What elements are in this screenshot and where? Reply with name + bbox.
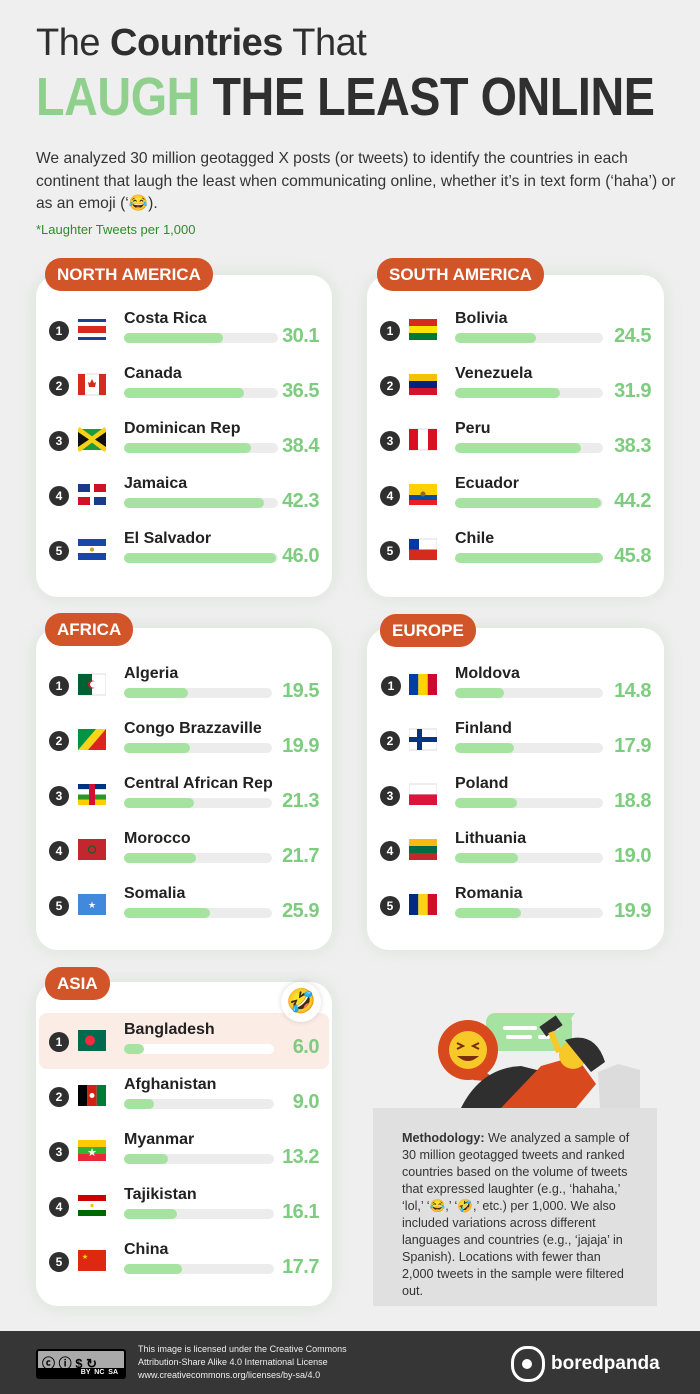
row: China: China xyxy=(124,1241,168,1258)
row: Peru: 3 xyxy=(387,434,393,448)
row: Chile xyxy=(380,530,651,567)
row: Congo xyxy=(49,720,319,757)
row: Moldova xyxy=(381,665,651,702)
row: Ecuador: 4 xyxy=(387,489,393,503)
row: Dominican Rep: 38.4 xyxy=(282,435,319,457)
label: south america: SOUTH AMERICA xyxy=(389,265,532,284)
row: Tajikistan xyxy=(49,1186,319,1223)
row: Jamaica: 4 xyxy=(56,489,62,503)
row: Myanmar: ★ xyxy=(87,1147,97,1159)
logo: boredpanda xyxy=(511,1346,660,1382)
row: Myanmar: Myanmar xyxy=(124,1131,194,1148)
icon: cc license badge: ⓒ ⓘ $ ↻ xyxy=(42,1356,97,1371)
label: europe: EUROPE xyxy=(392,621,464,640)
row: Costa Rica: 1 xyxy=(56,324,62,338)
row: Bangladesh xyxy=(49,1021,319,1058)
row: El Salvador: 46.0 xyxy=(282,545,319,567)
footer xyxy=(0,1331,700,1394)
speech bubble green xyxy=(486,1013,575,1051)
label: africa xyxy=(45,613,133,646)
row: Congo: Congo Brazzaville xyxy=(124,720,262,737)
row: Moldova: 14.8 xyxy=(614,680,651,702)
row: Myanmar: 13.2 xyxy=(282,1146,319,1168)
row: El Salvador xyxy=(49,530,319,567)
row: Somalia xyxy=(49,885,319,922)
highlight row background xyxy=(39,1013,329,1069)
row: Afghanistan: 2 xyxy=(56,1090,62,1104)
row: Afghanistan xyxy=(49,1076,319,1113)
row: Jamaica: Jamaica xyxy=(124,475,187,492)
row: Finland: Finland xyxy=(455,720,512,737)
row: China: ★ xyxy=(82,1253,88,1261)
row: Algeria: Algeria xyxy=(124,665,178,682)
row: Peru xyxy=(380,420,651,457)
row: Venezuela: 31.9 xyxy=(614,380,651,402)
label: north america xyxy=(45,258,213,291)
row: Jamaica: 42.3 xyxy=(282,490,319,512)
row: Lithuania: 19.0 xyxy=(614,845,651,867)
row: Morocco: 21.7 xyxy=(282,845,319,867)
panel: europe xyxy=(367,628,664,950)
row: Somalia: 5 xyxy=(56,899,62,913)
license text: This image is licensed under the Creative Commons xyxy=(138,1344,347,1354)
row: Venezuela: Venezuela xyxy=(455,365,532,382)
row: Poland: Poland xyxy=(455,775,508,792)
row: Bolivia: 24.5 xyxy=(614,325,651,347)
row: Morocco xyxy=(49,830,319,867)
row: Morocco: Morocco xyxy=(124,830,191,847)
icon: laughing emoji badge xyxy=(281,982,321,1022)
license text xyxy=(138,1344,347,1380)
row: Lithuania: 4 xyxy=(387,844,393,858)
row: Dominican Rep xyxy=(49,420,320,457)
row: Moldova: Moldova xyxy=(455,665,520,682)
row: China: 5 xyxy=(56,1255,62,1269)
row: China: 17.7 xyxy=(282,1256,319,1278)
icon: laughing emoji badge: 🤣 xyxy=(286,988,316,1015)
row: Bolivia xyxy=(380,310,651,347)
methodology box: Methodology: We analyzed a sample of 30 million geotagged tweets and ranked countries based on the volume of tweets that expressed laughter (e.g., ‘hahaha,’ ‘lol,’ ‘😂,’ ‘🤣,’ etc.) per 1,000. We also included variations across different languages and countries (e.g., ‘jajaja’ in Spanish). Locations with fewer than 2,000 tweets in the sample were filtered out. xyxy=(402,1131,629,1298)
row: Costa Rica: 30.1 xyxy=(282,325,319,347)
label: north america: NORTH AMERICA xyxy=(57,265,201,284)
row: Costa Rica: Costa Rica xyxy=(124,310,207,327)
row: Algeria xyxy=(49,665,319,702)
title: The Countries That xyxy=(36,22,366,64)
row: Bolivia: Bolivia xyxy=(455,310,507,327)
logo: boredpanda: boredpanda xyxy=(551,1353,660,1374)
row: Peru: Peru xyxy=(455,420,491,437)
row: Somalia: Somalia xyxy=(124,885,185,902)
row: Canada: 2 xyxy=(56,379,62,393)
emoji bubble orange xyxy=(438,1020,499,1082)
row: Algeria: 19.5 xyxy=(282,680,319,702)
label: asia xyxy=(45,967,110,1000)
row: Afghanistan: 9.0 xyxy=(293,1091,319,1113)
row: Finland: 17.9 xyxy=(614,735,651,757)
row: Poland: 3 xyxy=(387,789,393,803)
row: Lithuania: Lithuania xyxy=(455,830,526,847)
intro text: We analyzed 30 million geotagged X posts (or tweets) to identify the countries in each continent that laugh the least when communicating online, whether it’s in text form (‘haha’) or as an emoji (‘😂). xyxy=(36,150,675,212)
row: Ecuador: 44.2 xyxy=(614,490,651,512)
row: Myanmar: 3 xyxy=(56,1145,62,1159)
row: Congo: 2 xyxy=(56,734,62,748)
row: Tajikistan: 16.1 xyxy=(282,1201,319,1223)
illustration: person laughing with speech bubbles xyxy=(438,1013,640,1108)
row: China xyxy=(49,1241,319,1278)
row: Morocco: 4 xyxy=(56,844,62,858)
panel: asia xyxy=(36,982,332,1306)
row: Ecuador xyxy=(380,475,651,512)
row: Bolivia: 1 xyxy=(387,324,393,338)
methodology box xyxy=(373,1108,657,1306)
label: africa: AFRICA xyxy=(57,620,121,639)
row: Dominican Rep: Dominican Rep xyxy=(124,420,240,437)
row: Central African Rep: Central African Rep xyxy=(124,775,273,792)
row: Poland: 18.8 xyxy=(614,790,651,812)
row: Bangladesh: 1 xyxy=(56,1035,62,1049)
row: El Salvador: El Salvador xyxy=(124,530,211,547)
row: Canada: 36.5 xyxy=(282,380,319,402)
row: Central African Rep: 21.3 xyxy=(282,790,319,812)
row: Jamaica xyxy=(49,475,319,512)
title line 2: LAUGH THE LEAST ONLINE xyxy=(36,67,654,127)
row: Canada: Canada xyxy=(124,365,182,382)
row: Costa Rica xyxy=(49,310,319,347)
row: Lithuania xyxy=(380,830,651,867)
label: europe xyxy=(380,614,476,647)
row: El Salvador: 5 xyxy=(56,544,62,558)
row: Chile: 45.8 xyxy=(614,545,651,567)
row: Chile: Chile xyxy=(455,530,494,547)
row: Finland: 2 xyxy=(387,734,393,748)
row: Algeria: 1 xyxy=(56,679,62,693)
panel: north america xyxy=(36,275,332,597)
row: Congo: 19.9 xyxy=(282,735,319,757)
row: Canada xyxy=(49,365,319,402)
label: south america xyxy=(377,258,544,291)
license text: www.creativecommons.org/licenses/by-sa/4.0 xyxy=(138,1370,320,1380)
row: Tajikistan: 4 xyxy=(56,1200,62,1214)
row: Central African Rep: 3 xyxy=(56,789,62,803)
row: Romania xyxy=(380,885,651,922)
row: Romania: 5 xyxy=(387,899,393,913)
row: Ecuador: Ecuador xyxy=(455,475,519,492)
row: Somalia: ★ xyxy=(88,900,96,910)
row: Finland xyxy=(380,720,651,757)
license text: Attribution-Share Alike 4.0 International License xyxy=(138,1357,328,1367)
row: Venezuela: 2 xyxy=(387,379,393,393)
row: Somalia: 25.9 xyxy=(282,900,319,922)
panel: africa xyxy=(36,628,332,950)
row: Venezuela xyxy=(380,365,651,402)
row: Peru: 38.3 xyxy=(614,435,651,457)
row: Central African Rep xyxy=(49,775,319,812)
row: Romania: 19.9 xyxy=(614,900,651,922)
icon: cc license badge xyxy=(36,1349,126,1379)
row: Moldova: 1 xyxy=(388,679,394,693)
row: Bangladesh: 6.0 xyxy=(293,1036,319,1058)
legend note: *Laughter Tweets per 1,000 xyxy=(36,222,196,237)
row: Poland xyxy=(380,775,651,812)
row: Tajikistan: Tajikistan xyxy=(124,1186,197,1203)
row: Bangladesh: Bangladesh xyxy=(124,1021,215,1038)
label: asia: ASIA xyxy=(57,974,98,993)
icon: cc license badge: BY NC SA xyxy=(81,1369,118,1376)
row: Romania: Romania xyxy=(455,885,523,902)
panel: south america xyxy=(367,275,664,597)
person xyxy=(461,1015,640,1108)
row: Chile: 5 xyxy=(387,544,393,558)
row: Afghanistan: Afghanistan xyxy=(124,1076,216,1093)
row: Myanmar xyxy=(49,1131,319,1168)
row: Dominican Rep: 3 xyxy=(56,434,62,448)
